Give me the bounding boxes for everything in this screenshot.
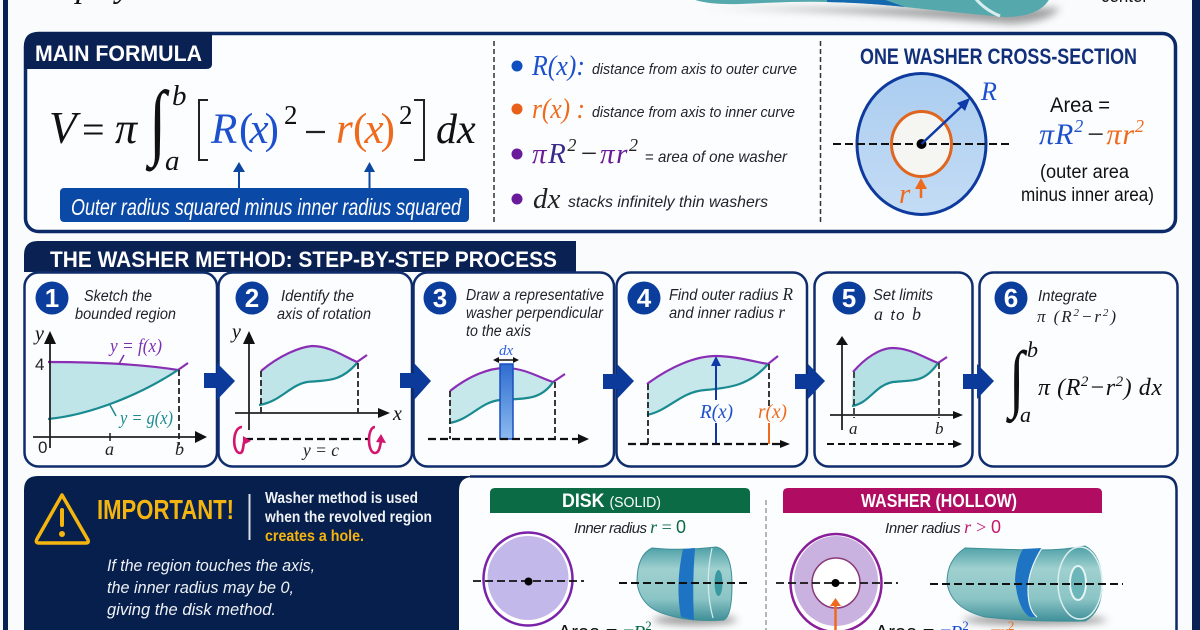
legend: formula terms: dx: [533, 183, 560, 215]
step 5 card: 5: [842, 283, 856, 313]
formula: volume integral: 2: [284, 100, 298, 130]
callout: outer minus inner: Outer radius squared minus inner radius squared: [71, 194, 462, 220]
step 3 card: 3: [433, 283, 447, 313]
formula: definite integral: b: [1027, 337, 1038, 362]
step 2 card: [218, 272, 412, 466]
chart: representative washer: [428, 343, 589, 444]
panel: important note: [24, 476, 480, 630]
text: disk method note: If the region touches the axis,: [107, 556, 315, 575]
chart: outer and inner radius: [628, 356, 790, 448]
legend: formula terms: R(x):: [531, 50, 585, 82]
formula: volume integral: r: [336, 106, 353, 153]
chart: limits a to b: a: [849, 419, 858, 438]
chart: limits a to b: b: [935, 419, 944, 438]
step 5 card: a to b: [874, 304, 921, 324]
text: disk method note: giving the disk method.: [107, 600, 276, 619]
chart: axis of rotation: x: [392, 403, 402, 425]
step 4 card: Find outer radius R: [669, 284, 793, 304]
panel: main formula: [24, 32, 1176, 232]
step 1 card: bounded region: [75, 306, 176, 323]
diagram: hollow cylinder: [930, 546, 1123, 625]
formula: volume integral: V: [49, 103, 81, 153]
legend: formula terms: r(x) :: [532, 93, 585, 125]
legend: formula terms: πR: [532, 138, 566, 170]
text: when to use the washer method: creates a hole.: [265, 528, 364, 545]
chart: bounded region: [33, 323, 207, 459]
icon: warning triangle: [36, 495, 88, 543]
step 5 card: [814, 272, 972, 466]
text: when to use the washer method: Washer method is used: [265, 490, 418, 507]
step 5 card: Set limits: [873, 287, 933, 304]
formula: volume integral: [49, 75, 476, 177]
step 6 card: Integrate: [1038, 288, 1097, 305]
step 6 card: [980, 272, 1178, 466]
step 3 card: washer perpendicular: [466, 305, 604, 322]
column: washer: [776, 488, 1123, 630]
step 1 card: [24, 272, 217, 466]
step 1 card: Sketch the: [84, 288, 152, 305]
diagram: washer cross-section: r: [899, 178, 911, 210]
chart: outer and inner radius: r(x): [758, 401, 787, 423]
arrows: pointing to R and r: [233, 162, 375, 190]
area formula: Area =: [1050, 94, 1110, 117]
step 4 card: [616, 272, 807, 466]
chart: bounded region: y = f(x): [108, 336, 162, 357]
formula: volume integral: ∫: [146, 75, 170, 172]
step 4 card: 4: [637, 283, 652, 313]
diagram: washer cross-section: [833, 74, 1010, 214]
formula: definite integral: dx: [1139, 375, 1162, 401]
heading: one washer cross-section: ONE WASHER CROSS-SECTION: [860, 44, 1137, 69]
legend: formula terms: −: [579, 138, 598, 170]
formula: volume integral: (x): [353, 106, 395, 153]
step 6 card: π (R: [1037, 307, 1072, 326]
area formula: 2: [1135, 116, 1144, 136]
step 6 card: 2: [1103, 307, 1109, 319]
formula: volume integral: (x): [239, 106, 279, 153]
step 3 card: [414, 272, 614, 466]
formula: definite integral: π (R: [1038, 375, 1080, 401]
diagram: solid disk: [473, 532, 584, 626]
formula: volume integral: a: [165, 145, 180, 177]
arrow: step 4 to 5: [795, 364, 825, 399]
header: disk: DISK (SOLID): [562, 491, 661, 512]
step 2 card: axis of rotation: [277, 306, 371, 323]
text: disk method note: [107, 556, 315, 619]
step 6 card: ): [1109, 307, 1116, 326]
step 3 card: to the axis: [466, 323, 531, 340]
area formula: (outer area: [1040, 162, 1129, 183]
header: disk: [490, 488, 750, 513]
formula: volume integral: π: [115, 104, 139, 153]
chart: limits a to b: [827, 336, 963, 448]
step 6 card: −: [1081, 307, 1092, 326]
chart: bounded region: y = g(x): [118, 408, 173, 429]
area formula: 2: [1074, 116, 1083, 136]
step 3 card: Draw a representative: [466, 287, 604, 304]
step 6 card: r: [1094, 307, 1101, 326]
header: washer: WASHER (HOLLOW): [861, 491, 1017, 511]
formula: definite integral: r: [1106, 375, 1115, 401]
chart: axis of rotation: y = c: [301, 440, 339, 460]
step 1 card: 1: [45, 283, 59, 313]
chart: axis of rotation: y: [230, 321, 241, 343]
formula: volume integral: =: [82, 107, 105, 152]
area formula: πr: [1106, 118, 1134, 151]
formula: definite integral: ∫: [1006, 337, 1028, 423]
text: when to use the washer method: when the revolved region: [264, 509, 432, 526]
arrow: step 1 to 2: [204, 363, 235, 400]
header: washer: [783, 488, 1102, 513]
formula: definite integral: [1006, 337, 1162, 427]
step 2 card: Identify the: [281, 288, 354, 305]
chart: axis of rotation: [230, 321, 402, 460]
formula: volume integral: 2: [399, 100, 412, 130]
step 2 card: 2: [245, 283, 259, 313]
diagram: solid cylinder: [619, 547, 750, 625]
label: inner radius zero: Inner radius r = 0: [574, 517, 686, 537]
heading: main formula: [24, 32, 212, 69]
diagram: washer cross-section: R: [980, 77, 997, 106]
formula: volume integral: dx: [436, 107, 476, 153]
legend: formula terms: distance from axis to inner curve: [592, 104, 795, 121]
callout: outer minus inner: [60, 188, 469, 222]
arrow: step 3 to 4: [603, 364, 634, 399]
heading: step-by-step process: THE WASHER METHOD: STEP-BY-STEP PROCESS: [50, 247, 557, 272]
chart: bounded region: 0: [38, 438, 47, 457]
panel: disk versus washer comparison: [459, 476, 1176, 630]
chart: outer and inner radius: R(x): [699, 401, 733, 423]
formula: volume integral: b: [172, 80, 186, 112]
formula: definite integral: −: [1089, 375, 1105, 401]
step 4 card: and inner radius r: [669, 302, 786, 322]
arrow: step 2 to 3: [400, 363, 431, 400]
top edge: cropped header remnants: [74, 0, 1148, 24]
legend: formula terms: 2: [629, 135, 638, 155]
legend: formula terms: [512, 50, 797, 215]
area formula: minus inner area): [1021, 185, 1154, 206]
legend: formula terms: stacks infinitely thin washers: [568, 194, 768, 211]
formula: volume integral: R: [210, 106, 237, 153]
text: when to use the washer method: [264, 490, 432, 545]
chart: bounded region: y: [33, 323, 44, 345]
chart: bounded region: b: [175, 439, 184, 459]
chart: representative washer: dx: [499, 343, 514, 359]
formula: definite integral: ): [1122, 375, 1132, 401]
area formula: πR: [1039, 118, 1073, 151]
legend: formula terms: 2: [567, 135, 576, 155]
heading: important: IMPORTANT!: [97, 494, 234, 525]
area formula: −: [1085, 118, 1105, 151]
diagram: hollow washer: [776, 534, 898, 630]
legend: formula terms: πr: [600, 138, 627, 170]
formula: definite integral: 2: [1081, 374, 1089, 390]
formula: definite integral: a: [1020, 402, 1031, 427]
chart: bounded region: a: [105, 439, 114, 459]
step 6 card: 6: [1004, 283, 1018, 313]
column: disk: [473, 488, 750, 630]
text: disk method note: the inner radius may be 0,: [107, 578, 294, 597]
step 6 card: 2: [1074, 307, 1080, 319]
label: inner radius positive: Inner radius r > 0: [885, 517, 1001, 537]
arrow: step 5 to 6: [963, 364, 994, 399]
heading: main formula: MAIN FORMULA: [35, 41, 202, 66]
area formula: [1021, 94, 1154, 206]
legend: formula terms: = area of one washer: [645, 149, 788, 166]
section: step-by-step process: [24, 241, 1178, 466]
legend: formula terms: distance from axis to outer curve: [592, 61, 797, 78]
formula: definite integral: 2: [1116, 374, 1124, 390]
chart: bounded region: 4: [35, 355, 44, 374]
